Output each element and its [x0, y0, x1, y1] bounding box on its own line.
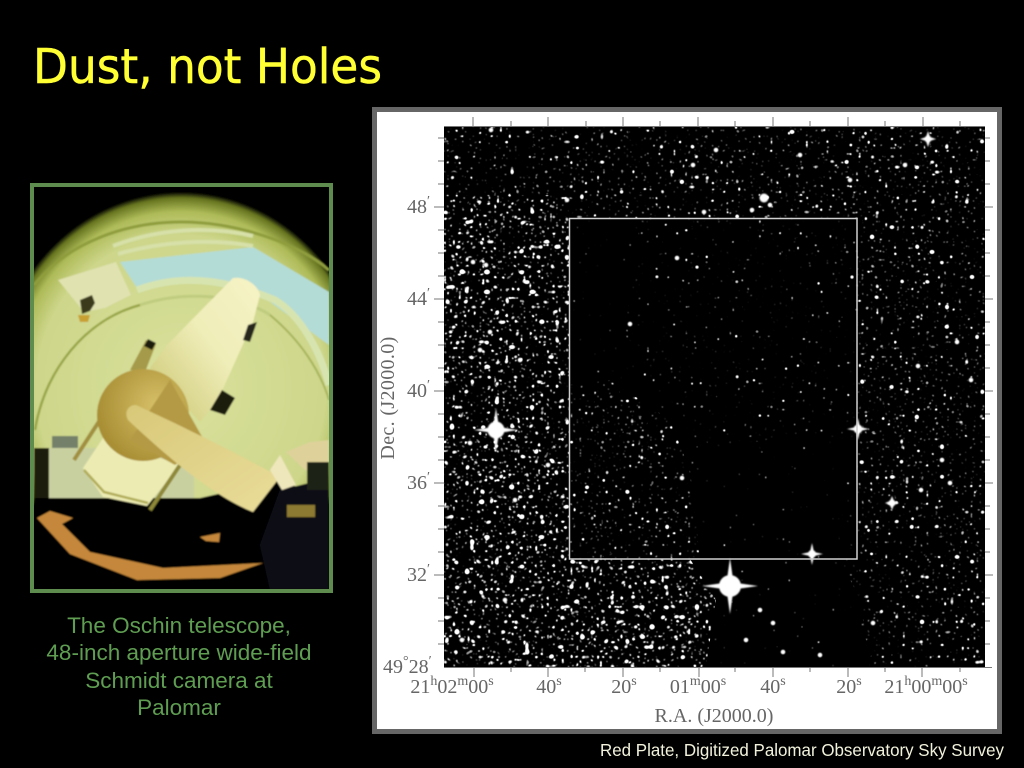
axis labels: declination: ′ — [427, 286, 430, 301]
sunlit floor patch — [37, 511, 263, 580]
photo caption — [46, 613, 312, 720]
telescope tube — [150, 278, 260, 422]
upper rim band — [34, 222, 329, 285]
bright star: west — [474, 408, 518, 452]
axis labels: declination: ′ — [429, 654, 432, 669]
axis labels: right ascension: 00 — [701, 676, 721, 698]
dome interior — [34, 192, 329, 506]
photo caption: The Oschin telescope, — [67, 613, 291, 638]
axis labels: right ascension: 00 — [942, 676, 962, 698]
axis labels: declination: ′ — [427, 562, 430, 577]
axis labels: declination: ° — [403, 654, 409, 669]
photo caption: Schmidt camera at — [85, 668, 274, 693]
axis labels: declination: ′ — [427, 194, 430, 209]
axis title: declination: Dec. (J2000.0) — [377, 336, 399, 460]
catwalk equipment — [58, 262, 131, 312]
axis ticks — [434, 117, 993, 677]
axis labels: right ascension: 21 — [884, 676, 904, 698]
bright star: south — [702, 558, 758, 614]
photo caption: Palomar — [137, 695, 221, 720]
axis labels: right ascension: h — [430, 674, 437, 689]
photo caption: 48-inch aperture wide-field — [46, 640, 312, 665]
open sky through slit — [120, 247, 329, 345]
axis labels: right ascension: s — [962, 674, 968, 689]
axis labels: right ascension: 21 — [410, 676, 430, 698]
cabinets — [34, 448, 194, 498]
panel: star chart — [374, 110, 1000, 732]
axis labels: right ascension: h — [904, 674, 911, 689]
photo: Oschin telescope — [30, 183, 333, 593]
axis labels: right ascension: 00 — [468, 676, 488, 698]
star cluster: north — [760, 194, 768, 202]
lower tube — [83, 438, 180, 506]
axis labels: right ascension — [410, 674, 968, 698]
floor — [34, 480, 296, 588]
axis labels: declination: 32 — [407, 564, 427, 586]
bright star: east — [885, 496, 899, 510]
empty region box — [570, 218, 857, 559]
axis labels: declination: 40 — [407, 380, 427, 402]
axis title: right ascension: R.A. (J2000.0) — [655, 705, 773, 727]
axis labels: right ascension: 40 — [536, 676, 556, 698]
axis labels: declination: 49 — [383, 656, 403, 678]
axis labels: right ascension: m — [690, 674, 701, 689]
axis labels: declination: 28 — [409, 656, 429, 678]
bright star: box east edge — [847, 418, 869, 440]
title: Dust, not Holes — [33, 39, 382, 95]
image credit: Red Plate, Digitized Palomar Observatory Sky Survey — [600, 740, 1004, 760]
axis labels: right ascension: s — [556, 674, 562, 689]
axis labels: right ascension: s — [856, 674, 862, 689]
axis labels: right ascension: s — [488, 674, 494, 689]
axis labels: right ascension: m — [457, 674, 468, 689]
axis labels: right ascension: 01 — [670, 676, 690, 698]
axis labels: right ascension: 40 — [760, 676, 780, 698]
axis labels: declination: ′ — [427, 378, 430, 393]
axis labels: declination: 48 — [407, 196, 427, 218]
slit bars — [113, 230, 253, 254]
instrument consoles — [260, 482, 329, 589]
axis labels: right ascension: s — [721, 674, 726, 689]
axis labels: right ascension: s — [780, 674, 786, 689]
axis labels: right ascension: 20 — [836, 676, 856, 698]
fork disc — [97, 369, 189, 461]
bright star: northeast — [920, 131, 936, 147]
axis labels: declination: 36 — [407, 472, 427, 494]
axis labels: declination: 44 — [407, 288, 427, 310]
star field image — [444, 127, 985, 667]
axis labels: right ascension: 02 — [437, 676, 457, 698]
axis labels: right ascension: m — [931, 674, 942, 689]
axis labels: right ascension: s — [631, 674, 637, 689]
axis labels: declination — [383, 194, 432, 678]
axis labels: right ascension: 00 — [911, 676, 931, 698]
axis labels: right ascension: 20 — [611, 676, 631, 698]
fork arm — [126, 405, 280, 512]
axis labels: declination: ′ — [427, 470, 430, 485]
bright star: box south edge — [801, 543, 823, 565]
far rib — [35, 305, 140, 430]
